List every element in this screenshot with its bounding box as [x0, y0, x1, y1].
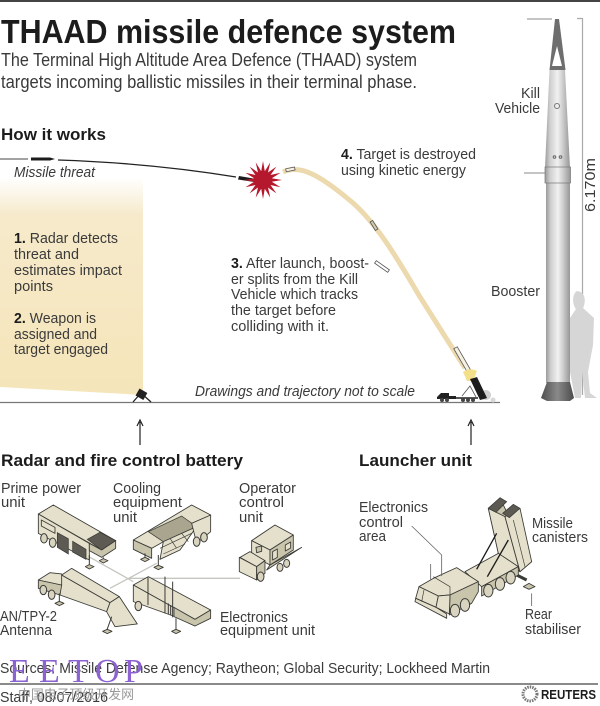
- text: steps 1 and 2: points: [14, 278, 53, 295]
- battery vehicles illustration: [38, 505, 302, 634]
- ground line: [0, 402, 500, 404]
- leader lines: [524, 19, 552, 173]
- text: step 3: colliding with it.: [231, 318, 329, 335]
- labels: launcher: [359, 499, 588, 638]
- text: step 4: [341, 146, 476, 179]
- truck bed: [465, 553, 518, 587]
- dimension line: [577, 18, 582, 395]
- interceptor trajectory: [283, 169, 465, 368]
- watermark: EETOP: T: [68, 653, 89, 690]
- icon: mini launcher: [437, 377, 496, 402]
- heading: how it works: How it works: [1, 125, 106, 144]
- vehicle: AN/TPY-2 antenna: [38, 568, 137, 634]
- labels: battery vehicles: Electronics: [220, 609, 288, 626]
- vehicle: electronics equipment unit: [133, 577, 211, 634]
- explosion: [244, 161, 282, 199]
- label: kill vehicle: Kill: [521, 85, 540, 102]
- text: step 4: using kinetic energy: [341, 162, 466, 179]
- labels: battery vehicles: unit: [239, 509, 264, 526]
- booster nozzle skirt: [541, 382, 574, 401]
- launcher vehicle illustration: [412, 498, 535, 618]
- text: steps 1 and 2: 1. Radar detects: [14, 230, 118, 247]
- leader lines: [412, 526, 532, 606]
- text: steps 1 and 2: assigned and: [14, 326, 97, 343]
- labels: launcher: control: [359, 514, 403, 531]
- watermark: EETOP: E: [9, 653, 30, 690]
- text: step 3: the target before: [231, 302, 336, 319]
- credit: Staff, 08/07/2016: [0, 689, 108, 706]
- vehicle: operator control unit: [239, 525, 302, 581]
- label: missile threat: Missile threat: [14, 164, 96, 181]
- subtitle: The Terminal High Altitude Area Defence (THAAD) system: [1, 50, 417, 70]
- text: step 3: 3. After launch, boost-: [231, 255, 369, 272]
- label: booster: Booster: [491, 283, 540, 300]
- text: step 3: er splits from the Kill: [231, 271, 358, 288]
- labels: battery vehicles: equipment: [113, 494, 183, 511]
- collar: [545, 167, 570, 183]
- labels: battery vehicles: Cooling: [113, 480, 161, 497]
- arrow: to radar battery: [137, 420, 143, 445]
- labels: battery vehicles: unit: [113, 509, 138, 526]
- rear stabiliser: [517, 575, 535, 589]
- labels: launcher: Electronics: [359, 499, 428, 516]
- canisters: [488, 498, 532, 572]
- nose cone: [550, 19, 566, 70]
- vehicle: prime power unit: [38, 505, 116, 569]
- text: steps 1 and 2: 2. Weapon is: [14, 310, 96, 327]
- labels: launcher: Rear: [525, 606, 552, 623]
- heading: radar and fire control battery: Radar and fire control battery: [1, 451, 244, 470]
- watermark: EETOP: O: [95, 653, 120, 690]
- interceptor missile launch: [454, 347, 477, 381]
- label: height: 6.170m: [582, 158, 599, 212]
- labels: battery vehicles: equipment unit: [220, 622, 316, 639]
- note: not to scale: Drawings and trajectory not to scale: [195, 383, 415, 400]
- ports: [554, 104, 560, 108]
- arrow: to launcher unit: [468, 420, 474, 445]
- heading: launcher unit: Launcher unit: [359, 451, 472, 470]
- watermark: EETOP: P: [124, 653, 143, 690]
- text: step 3: [231, 255, 369, 335]
- struts: [477, 533, 508, 577]
- kill vehicle on trajectory: [286, 167, 295, 172]
- labels: launcher: canisters: [532, 529, 588, 546]
- missile threat trajectory: [0, 158, 262, 183]
- label: kill vehicle: [495, 85, 540, 117]
- subtitle: targets incoming ballistic missiles in their terminal phase.: [1, 72, 417, 92]
- label: kill vehicle: Vehicle: [495, 100, 540, 117]
- labels: battery vehicles: Antenna: [0, 622, 53, 639]
- watermark: chinese: 中国电子顶级开发网: [18, 687, 134, 702]
- text: step 4: 4. Target is destroyed: [341, 146, 476, 163]
- labels: battery vehicles: unit: [1, 494, 26, 511]
- text: steps 1 and 2: threat and: [14, 246, 79, 263]
- vehicle: cooling equipment unit: [133, 505, 211, 570]
- person silhouette: [570, 291, 597, 398]
- booster body: [546, 183, 570, 383]
- radar coverage panel: [0, 178, 143, 395]
- labels: launcher: stabiliser: [525, 621, 581, 638]
- text: steps 1 and 2: target engaged: [14, 341, 108, 358]
- truck cab: [419, 568, 478, 596]
- watermark: EETOP: [9, 653, 143, 690]
- labels: battery vehicles: Operator: [239, 480, 296, 497]
- labels: battery vehicles: control: [239, 494, 284, 511]
- connecting lines: [90, 557, 240, 588]
- text: steps 1 and 2: [14, 230, 123, 358]
- title: THAAD missile defence system: [1, 13, 456, 50]
- sources: Sources: Missile Defense Agency; Raytheon; Global Security; Lockheed Martin: [0, 660, 490, 677]
- labels: launcher: area: [359, 528, 387, 545]
- text: steps 1 and 2: estimates impact: [14, 262, 123, 279]
- wheels: [450, 571, 515, 617]
- watermark: EETOP: E: [39, 653, 60, 690]
- labels: battery vehicles: [0, 480, 316, 639]
- labels: launcher: Missile: [532, 515, 573, 532]
- labels: battery vehicles: Prime power: [1, 480, 81, 497]
- subtitle: [1, 50, 417, 92]
- missile diagram: [524, 18, 597, 401]
- labels: battery vehicles: AN/TPY-2: [0, 608, 57, 625]
- separating booster stages: [370, 220, 389, 272]
- text: step 3: Vehicle which tracks: [231, 286, 358, 303]
- icon: mini radar: [133, 389, 151, 402]
- kill vehicle body: [545, 70, 570, 168]
